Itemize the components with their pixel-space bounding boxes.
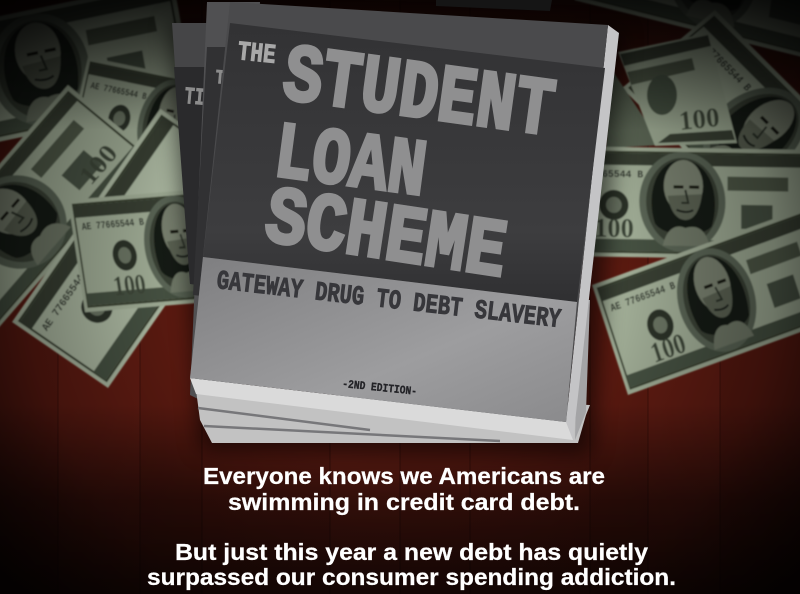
bill: lower right with portrait: AE 77665544 B: [609, 280, 677, 314]
subtitle: GATEWAY DRUG TO DEBT SLAVERY: [215, 267, 563, 336]
title: SCHEME: SCHEME: [259, 173, 512, 301]
cover lower band: [190, 257, 577, 422]
bill: lower right with portrait: 100: [647, 327, 690, 369]
bill: middle right with portrait: 100: [594, 212, 634, 243]
intro line 2: swimming in credit card debt.: [228, 489, 580, 515]
title: STUDENT: STUDENT: [278, 31, 560, 160]
rear book, second copy: T: [214, 67, 225, 91]
bill: front left: 100: [111, 269, 148, 302]
rear book, third copy: [172, 23, 240, 290]
bill: front left: AE 77665544 B: [81, 216, 145, 233]
front book cover: [190, 2, 608, 422]
bill: rotated left with green 100: 100: [73, 139, 123, 190]
bill: middle right with portrait: [555, 146, 800, 260]
bill: top left with portrait: [0, 0, 195, 161]
dollar bills, right pile: [555, 0, 800, 395]
bill: upper right: [618, 33, 737, 146]
bill: far right rotated: [622, 10, 800, 258]
bill: far right rotated: AE 77665544 B: [692, 36, 753, 94]
bill: lower right with portrait: [592, 207, 800, 395]
bill: top right strip: [575, 0, 800, 65]
bill: lower rotated: 100: [160, 185, 209, 236]
bill: upper right: 100: [677, 102, 721, 136]
bill: rotated left with green 100: [0, 85, 150, 360]
bill: middle right with portrait: AE 77665544 B: [567, 168, 643, 180]
page stack beneath the cover: [196, 0, 590, 443]
rear book, second copy: [190, 2, 260, 420]
intro line 4: surpassed our consumer spending addiction.: [147, 564, 676, 590]
intro line 1: Everyone knows we Americans are: [203, 463, 605, 489]
front book page edges: [566, 25, 619, 440]
rear book, third copy: TI: [183, 84, 206, 113]
intro text: [147, 463, 676, 590]
book shadow: [170, 20, 622, 455]
bill: behind, upper left: AE 77665544 B: [89, 80, 148, 103]
bill: front left: [68, 183, 292, 312]
dollar bills, left pile: [0, 0, 292, 388]
title: THE: THE: [236, 38, 277, 72]
bill: lower rotated: AE 77665544 B: [40, 263, 95, 334]
edition label: -2ND EDITION-: [342, 378, 418, 399]
cover dark title band: [203, 23, 605, 302]
bill: lower rotated: [12, 109, 256, 388]
front book lower page edge: [190, 378, 573, 440]
bill: sliver next to book: [606, 70, 662, 148]
top shadow: [0, 0, 800, 130]
bill: behind, upper left: [66, 57, 274, 195]
intro line 3: But just this year a new debt has quietly: [175, 539, 648, 565]
title: LOAN: LOAN: [269, 110, 431, 220]
